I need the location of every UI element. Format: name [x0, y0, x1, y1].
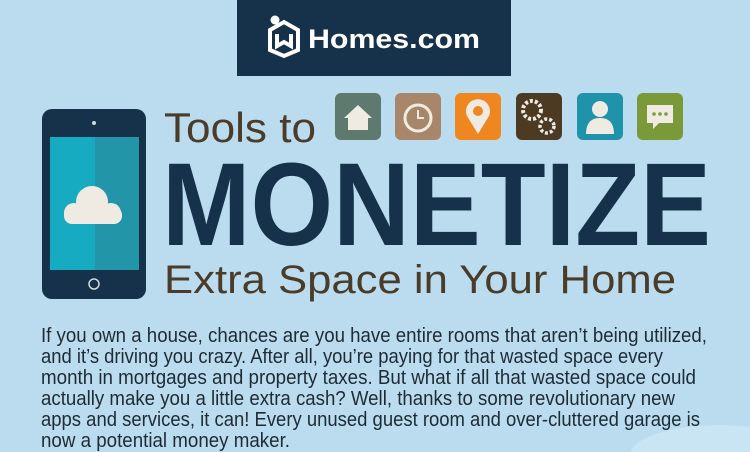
intro paragraph: now a potential money maker. [41, 430, 290, 452]
icon: home [335, 93, 381, 140]
icon: person [577, 93, 623, 140]
icon: clock [395, 93, 441, 140]
intro paragraph: actually make you a little extra cash? Well, thanks to some revolutionary new [41, 388, 676, 410]
icon: cloud [64, 186, 122, 224]
app icons row [335, 93, 683, 140]
logo text: Homes.com [308, 24, 480, 54]
intro paragraph: and it’s driving you crazy. After all, you’re paying for that wasted space every [41, 346, 663, 368]
phone [42, 109, 146, 299]
icon: homes logo [270, 18, 298, 56]
title: Tools to: Tools to [164, 104, 316, 151]
icon: location pin [455, 93, 501, 140]
logo box [237, 0, 511, 76]
phone screen [50, 137, 95, 270]
icon: chat [637, 93, 683, 140]
intro paragraph: apps and services, it can! Every unused guest room and over-cluttered garage is [41, 409, 700, 431]
intro paragraph: month in mortgages and property taxes. But what if all that wasted space could [41, 367, 696, 389]
icon: gears [516, 93, 562, 140]
title: Extra Space in Your Home: Extra Space in Your Home [164, 258, 676, 302]
intro paragraph: If you own a house, chances are you have entire rooms that aren’t being utilized, [41, 325, 707, 347]
intro paragraph [41, 325, 707, 452]
